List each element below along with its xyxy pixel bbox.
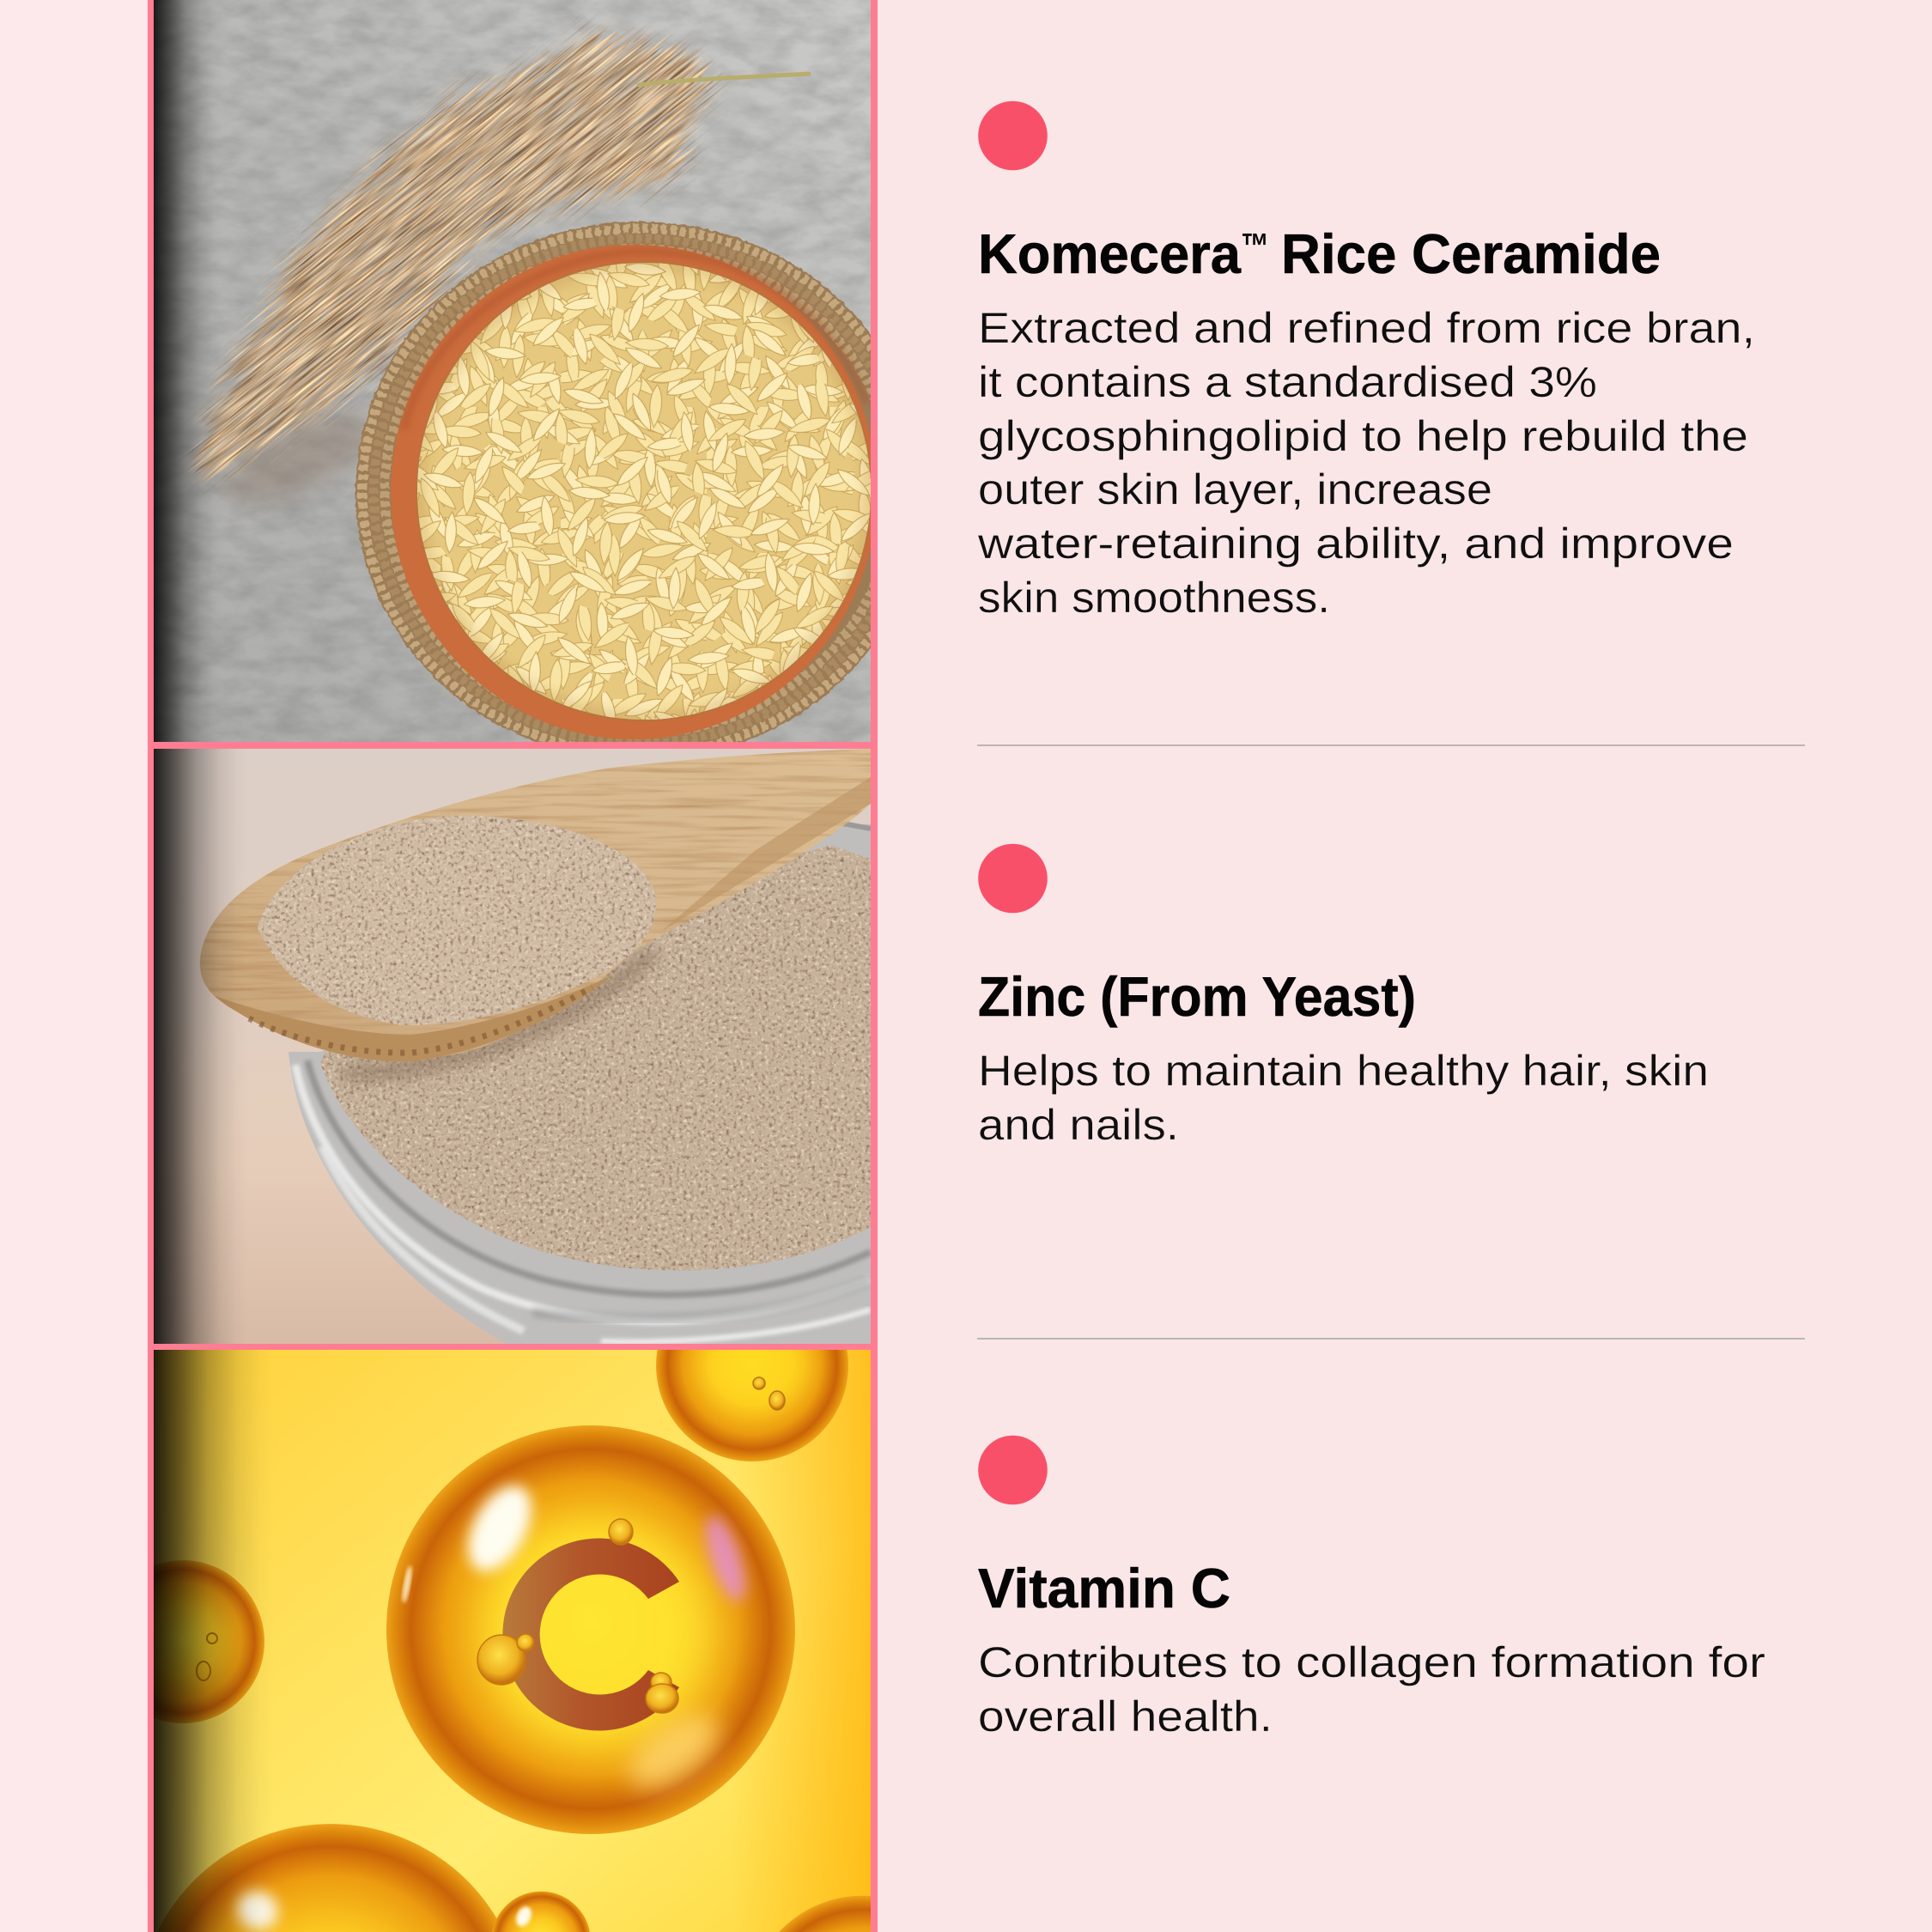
left vignette [154,1350,274,1932]
description [978,1638,1765,1741]
letter C [502,1539,679,1731]
description: glycosphingolipid to help rebuild the [978,412,1748,460]
heading: Rice Ceramide [1281,222,1661,285]
description: Extracted and refined from rice bran, [978,304,1755,352]
description: Helps to maintain healthy hair, skin [978,1047,1709,1095]
description [978,1047,1709,1149]
jute mat [354,221,871,742]
glass bowl [289,820,871,1344]
large central sphere [386,1425,795,1834]
description: and nails. [978,1101,1179,1149]
pink sheen [698,1511,753,1606]
bullet dot [978,101,1048,170]
droplets [753,1377,785,1410]
description: it contains a standardised 3% [978,358,1597,406]
white highlight [455,1475,544,1582]
description: Contributes to collagen formation for [978,1638,1765,1686]
left vignette [154,0,213,742]
heading: Komecera [978,222,1242,285]
stone surface [154,0,871,742]
ingredient block: Komecera Rice Ceramide [977,101,1755,622]
left vignette [154,749,248,1344]
description: overall health. [978,1692,1273,1741]
description: water-retaining ability, and improve [977,519,1734,568]
bullet dot [978,844,1048,913]
spoon shadow on powder [343,953,653,1073]
photo frame borders [148,0,878,1932]
heading: ™ [1241,226,1277,266]
droplets [197,1633,217,1680]
photo panel: rice in terracotta bowl [154,0,871,742]
photo panel: vitamin C golden spheres [101,1269,871,1932]
yellow backdrop [154,1350,871,1932]
bottom left sphere [157,1824,504,1932]
description: outer skin layer, increase [978,465,1492,513]
photo panel: yeast powder with wooden spoon [154,749,871,1344]
bottom middle sphere [492,1892,590,1932]
lower glow [617,1701,731,1802]
bullet dot [978,1436,1048,1504]
terracotta bowl [391,245,877,739]
bottom right sphere [779,1896,871,1932]
description [977,304,1755,622]
left sphere [101,1560,264,1723]
droplets on C [477,1519,678,1713]
ingredient block: Vitamin C [978,1436,1765,1741]
left margin background [0,0,148,1932]
edge glint [400,1565,414,1603]
grass stem [639,74,809,85]
yeast powder on spoon [258,816,656,1025]
dried grass plume [182,15,728,491]
rice grains [412,258,876,726]
description: skin smoothness. [978,574,1330,622]
top right sphere [656,1269,848,1461]
plume shadow [223,408,368,510]
heading: Vitamin C [978,1557,1230,1619]
yeast powder in bowl [320,845,871,1271]
wooden spoon [200,749,871,1061]
cloth backdrop [154,749,871,1344]
heading: Zinc (From Yeast) [978,965,1416,1028]
ingredient block: Zinc [978,844,1709,1149]
